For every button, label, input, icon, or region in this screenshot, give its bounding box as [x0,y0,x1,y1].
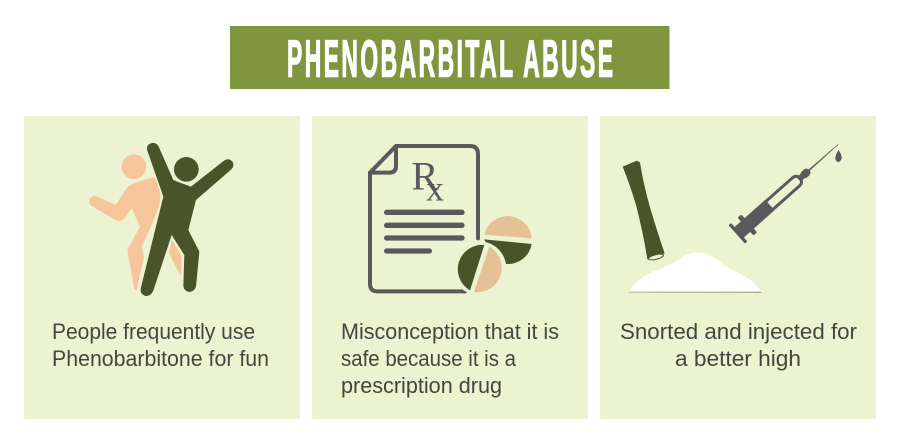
rx symbol [411,153,444,209]
prescription sheet [370,146,478,291]
title banner [230,26,670,89]
text: snorted and injected [620,319,857,371]
text: fun use: Phenobarbitone for fun [52,346,269,371]
text: misconception [341,319,559,398]
icon: straw and powder [623,161,762,293]
text: fun use [52,319,269,371]
text: misconception: safe because it is a [341,346,517,371]
panel: misconception [312,116,588,419]
panel: fun use [24,116,300,419]
text: misconception: prescription drug [341,373,502,398]
pills [484,216,532,238]
text: snorted and injected: Snorted and injected for [620,319,857,344]
text: snorted and injected: a better high [675,346,801,371]
text: fun use: People frequently use [52,319,255,344]
icon: dancing people [89,143,233,296]
rx symbol: R [411,153,439,198]
icon: prescription with pills [370,146,532,295]
text: misconception: Misconception that it is [341,319,559,344]
icon: syringe [729,135,846,244]
title banner: PHENOBARBITAL ABUSE [287,30,613,88]
panel: snorted and injected [600,116,876,419]
rx symbol: x [426,169,444,209]
